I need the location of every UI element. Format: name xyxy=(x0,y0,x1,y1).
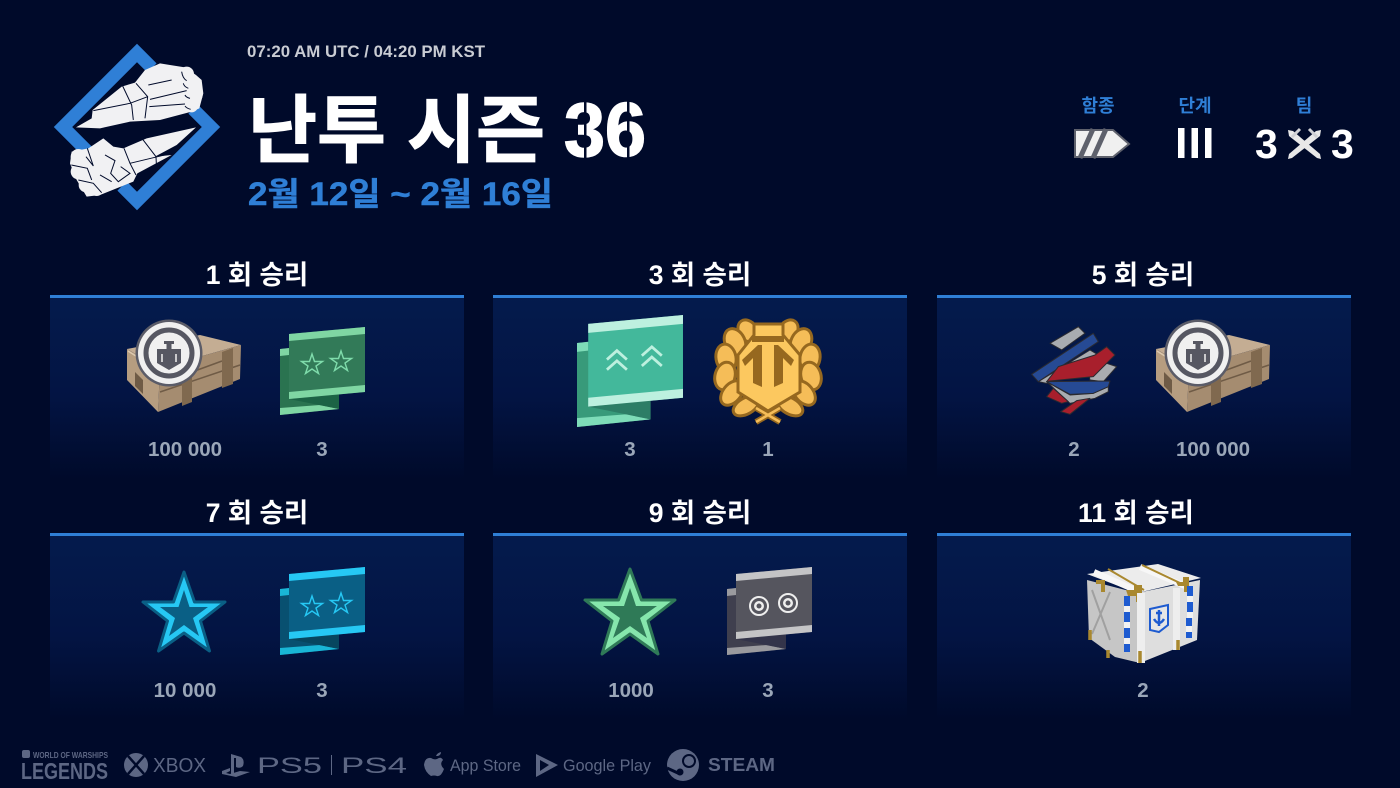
panel: 7 wins: 7 회 승리 xyxy=(206,498,308,528)
icon: blue star xyxy=(143,572,225,651)
logo: crossed gauntlets in diamond xyxy=(63,53,211,201)
logo: World of Warships Legends: WORLD OF WARSHIPS xyxy=(33,750,108,760)
date range: 2월 12일 ~ 2월 16일 xyxy=(248,176,553,212)
amount: credits: 100 000 xyxy=(1176,438,1250,461)
panel: 9 wins xyxy=(493,498,907,720)
logo: PlayStation 5 and 4: PS4 xyxy=(341,753,407,778)
footer: platform logos xyxy=(21,749,775,784)
amount: flags: 3 xyxy=(316,438,328,461)
amount: flags: 3 xyxy=(762,679,774,702)
panel: 9 wins: 9 회 승리 xyxy=(649,498,751,528)
panel: 5 wins xyxy=(937,260,1351,480)
icon: camouflage xyxy=(1032,327,1117,414)
logo: Steam: STEAM xyxy=(708,755,775,775)
amount: star: 10 000 xyxy=(154,679,216,702)
title: 난투 시즌 xyxy=(248,89,545,172)
logo: App Store: App Store xyxy=(450,756,521,775)
ship class xyxy=(1075,96,1129,158)
icon: credits crate xyxy=(1156,320,1270,412)
amount: flags: 3 xyxy=(316,679,328,702)
amount: containers: 2 xyxy=(1137,679,1149,702)
battle conditions xyxy=(1075,96,1354,167)
logo: PlayStation 5 and 4: PS5 xyxy=(257,753,322,778)
logo: PlayStation 5 and 4 xyxy=(222,753,407,778)
icon: blue star flag xyxy=(280,567,365,655)
amount: medal: 1 xyxy=(762,438,774,461)
panel: 7 wins xyxy=(50,498,464,720)
panel: 1 win: 1 회 승리 xyxy=(206,260,308,290)
logo: Google Play xyxy=(536,754,651,777)
ship class: 함종 xyxy=(1081,96,1115,116)
logo: World of Warships Legends xyxy=(21,750,108,784)
panel: 11 wins xyxy=(937,498,1351,720)
icon: gold laurel medal xyxy=(712,316,824,422)
logo: Xbox xyxy=(124,753,206,777)
amount: credits: 100 000 xyxy=(148,438,222,461)
amount: camouflage: 2 xyxy=(1068,438,1080,461)
icon: grey anchor flag xyxy=(727,567,812,655)
title: 36 xyxy=(564,88,646,173)
team xyxy=(1255,96,1354,167)
icon: credits crate xyxy=(127,320,241,412)
logo: App Store xyxy=(424,752,521,776)
logo: Google Play: Google Play xyxy=(563,756,651,775)
logo: Steam xyxy=(667,749,775,781)
logo: Xbox: XBOX xyxy=(153,755,206,777)
icon: green star xyxy=(585,569,675,654)
icon: white supercontainer xyxy=(1087,564,1201,663)
panel: 3 wins: 3 회 승리 xyxy=(649,260,751,290)
tier: 단계 xyxy=(1178,96,1212,116)
panel: 11 wins: 11 회 승리 xyxy=(1078,498,1194,528)
logo: World of Warships Legends: LEGENDS xyxy=(21,758,108,784)
time line: 07:20 AM UTC / 04:20 PM KST xyxy=(247,42,486,61)
panel: 1 win xyxy=(50,260,464,480)
icon: green star flag xyxy=(280,327,365,415)
icon: teal chevron flag xyxy=(577,315,683,427)
team: 3 xyxy=(1331,121,1354,167)
amount: flags: 3 xyxy=(624,438,636,461)
tier xyxy=(1178,96,1212,158)
team: 팀 xyxy=(1296,96,1312,116)
amount: star: 1000 xyxy=(608,679,654,702)
team: 3 xyxy=(1255,121,1278,167)
panel: 3 wins xyxy=(493,260,907,480)
panel: 5 wins: 5 회 승리 xyxy=(1092,260,1194,290)
